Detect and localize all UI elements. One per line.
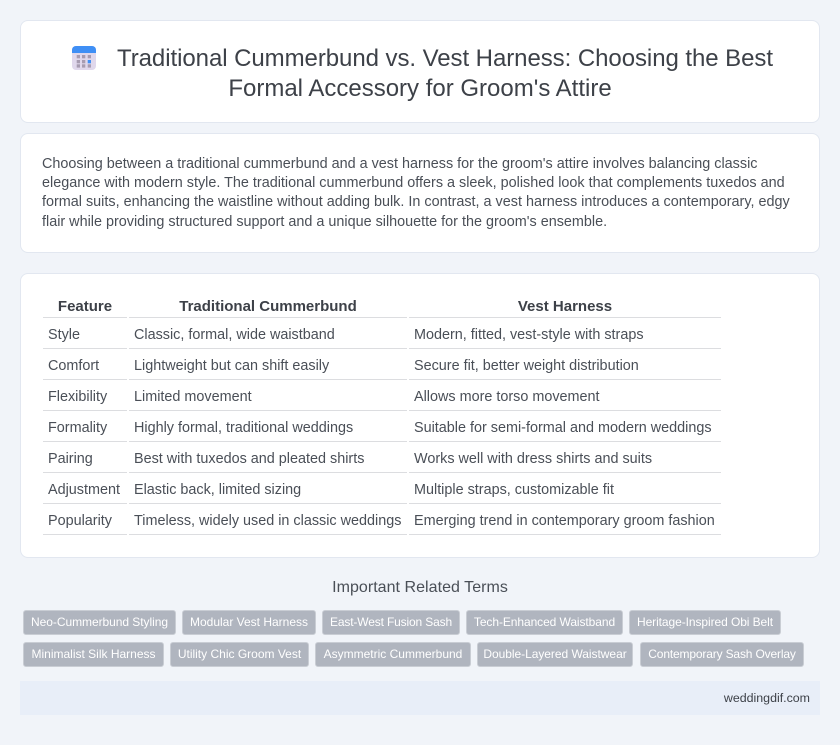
table: comparison: Traditional Cummerbund <box>179 298 357 315</box>
table: comparison: Secure fit, better weight distribution <box>414 358 639 374</box>
panel: header <box>20 20 820 123</box>
table: comparison <box>43 298 721 535</box>
table: comparison: Flexibility <box>48 389 107 405</box>
tags: related terms: Contemporary Sash Overlay <box>648 647 796 661</box>
tags: related terms: Double-Layered Waistwear <box>483 647 627 661</box>
icon: calendar <box>72 46 96 70</box>
table: comparison: Formality <box>48 420 107 436</box>
tags: related terms: Neo-Cummerbund Styling <box>31 615 168 629</box>
table: comparison: Best with tuxedos and pleated shirts <box>134 451 364 467</box>
table: comparison: Emerging trend in contemporary groom fashion <box>414 513 715 529</box>
title: Traditional Cummerbund vs. Vest Harness: Choosing the Best <box>117 45 773 72</box>
text: introduction: Choosing between a traditional cummerbund and a vest harness for the groom's attire involves balancing classic <box>42 156 757 172</box>
table: comparison: Suitable for semi-formal and modern weddings <box>414 420 712 436</box>
text: introduction <box>42 156 790 230</box>
table: comparison: Limited movement <box>134 389 252 405</box>
tags: related terms: Utility Chic Groom Vest <box>178 647 301 661</box>
table: comparison: Adjustment <box>48 482 120 498</box>
table: comparison: Timeless, widely used in classic weddings <box>134 513 401 529</box>
table: comparison: Vest Harness <box>518 298 612 315</box>
heading: related terms: Important Related Terms <box>332 579 508 596</box>
tags: related terms: Asymmetric Cummerbund <box>324 647 462 661</box>
tags: related terms: Heritage-Inspired Obi Belt <box>637 615 773 629</box>
tags: related terms: Minimalist Silk Harness <box>31 647 156 661</box>
table: comparison: Modern, fitted, vest-style with straps <box>414 327 644 343</box>
table: comparison: Allows more torso movement <box>414 389 600 405</box>
table: comparison: Comfort <box>48 358 99 374</box>
table: comparison: Highly formal, traditional weddings <box>134 420 353 436</box>
table: comparison: Pairing <box>48 451 93 467</box>
table: comparison: Lightweight but can shift easily <box>134 358 329 374</box>
table: comparison: Elastic back, limited sizing <box>134 482 301 498</box>
footer bar <box>20 681 820 715</box>
text: introduction: elegance with modern style. The traditional cummerbund offers a sleek, polished look that complements tuxedos and <box>42 175 785 191</box>
table: comparison: Style <box>48 327 80 343</box>
footer: site name: weddingdif.com <box>724 691 810 705</box>
tags: related terms: Tech-Enhanced Waistband <box>474 615 615 629</box>
title <box>117 45 773 102</box>
table: comparison: Popularity <box>48 513 112 529</box>
tags: related terms: Modular Vest Harness <box>190 615 308 629</box>
text: introduction: flair while providing structured support and a unique silhouette for the groom's ensemble. <box>42 214 607 230</box>
table: comparison: Multiple straps, customizable fit <box>414 482 614 498</box>
table: comparison: Works well with dress shirts and suits <box>414 451 652 467</box>
text: introduction: formal suits, enhancing the waistline without adding bulk. In contrast, a vest harness introduces a contemporary, edgy <box>42 194 790 210</box>
header: Feature: Feature <box>58 298 112 315</box>
panel: introduction <box>20 133 820 253</box>
title: Formal Accessory for Groom's Attire <box>228 75 612 102</box>
table: comparison: Classic, formal, wide waistband <box>134 327 335 343</box>
tags: related terms <box>23 610 804 667</box>
panel: comparison table <box>20 273 820 558</box>
tags: related terms: East-West Fusion Sash <box>330 615 452 629</box>
